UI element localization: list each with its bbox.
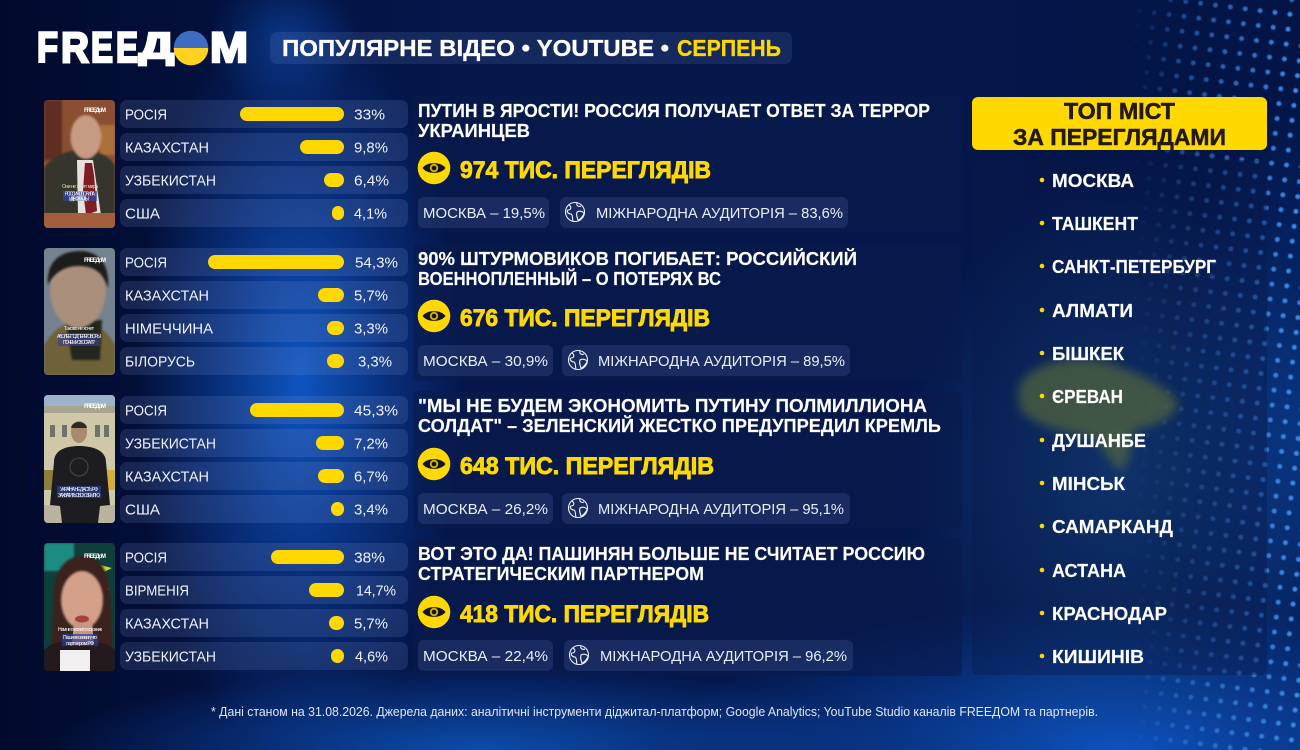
thumbnail: video 2: FREEДoM [84,258,106,264]
thumbnail: video 1: РОССИЯ СПОРИЛА [65,192,96,198]
thumbnail: video 4 [44,543,115,671]
info card: video 1: МОСКВА – 19,5% [423,205,545,222]
city list: АЛМАТИ [1052,300,1133,321]
country bars: video 4: УЗБЕКИСТАН [125,648,216,666]
thumbnail: video 1: FREEДoM [84,108,106,114]
info card: video 2: 90% ШТУРМОВИКОВ ПОГИБАЕТ: РОССИЙСКИЙ [418,248,857,269]
thumbnail: video 4: партнером РФ [66,641,94,647]
country bars: video 2: 3,3% [354,320,388,338]
info card: video 4: 418 ТИС. ПЕРЕГЛЯДІВ [460,601,709,628]
thumbnail: video 4: Нам не считается союзник [58,627,103,633]
header pill: СЕРПЕНЬ [677,35,781,61]
info card: video 1 [413,95,962,233]
logo: M [210,24,248,72]
country bars: video 4: 4,6% [355,648,388,666]
country bars: video 4: РОСІЯ [125,550,167,566]
country bars: video 4 [120,543,408,670]
info card: video 2: МОСКВА – 30,9% [423,353,548,370]
panel: video 1 [44,95,962,233]
info card: video 4: СТРАТЕГИЧЕСКИМ ПАРТНЕРОМ [418,563,704,584]
thumbnail: video 2 [44,248,115,375]
info card: video 4: МІЖНАРОДНА АУДИТОРІЯ – 96,2% [600,648,847,665]
city list: МІНСЬК [1052,473,1126,494]
thumbnail: video 1: Они не хотят мира [62,184,98,190]
city list: ТАШКЕНТ [1052,213,1139,234]
thumbnail: video 1: ИДЕЮ СВОБОДЫ [69,196,90,202]
info card: video 3: 648 ТИС. ПЕРЕГЛЯДІВ [460,453,714,480]
country bars: video 3: КАЗАХСТАН [125,468,209,486]
city list: КРАСНОДАР [1052,603,1167,624]
info card: video 1: МІЖНАРОДНА АУДИТОРІЯ – 83,6% [596,205,843,222]
country bars: video 1: КАЗАХСТАН [125,140,209,156]
country bars: video 4: 38% [354,550,385,566]
country bars: video 1: УЗБЕКИСТАН [125,172,216,190]
footnote: * Дані станом на 31.08.2026. Джерела даних: аналітичні інструменти діджитал-платформ; Google Analytics; YouTube Studio каналів FREEДOM та партнерів. [211,705,1098,719]
thumbnail: video 4: FREEДoM [84,554,106,560]
info card: video 4 [413,538,962,676]
heading: top cities [972,97,1267,150]
country bars: video 3: 3,4% [354,502,388,518]
info card: video 4: МОСКВА – 22,4% [423,648,548,665]
logo: E [116,24,138,72]
logo: E [91,24,113,72]
info card: video 1: УКРАИНЦЕВ [418,120,530,141]
info card: video 3: СОЛДАТ" – ЗЕЛЕНСКИЙ ЖЕСТКО ПРЕДУПРЕДИЛ КРЕМЛЬ [418,415,941,436]
country bars: video 2: 5,7% [354,288,388,304]
country bars: video 4: ВІРМЕНІЯ [125,582,189,600]
country bars: video 1: 6,4% [354,172,389,190]
country bars: video 4: 5,7% [354,616,388,632]
logo [38,30,246,66]
panel: video 3 [44,391,962,529]
country bars: video 1: США [125,206,160,222]
info card: video 3 [413,391,962,529]
city list: БІШКЕК [1052,343,1125,364]
info card: video 3: МОСКВА – 26,2% [423,501,548,518]
info card: video 4: ВОТ ЭТО ДА! ПАШИНЯН БОЛЬШЕ НЕ СЧИТАЕТ РОССИЮ [418,543,925,564]
thumbnail: video 2: Таково не хочет [64,326,95,332]
country bars: video 1: 4,1% [354,206,387,222]
country bars: video 2: 54,3% [355,254,398,272]
country bars: video 4: КАЗАХСТАН [125,616,209,632]
info card: video 2 [413,243,962,381]
heading: top cities: ЗА ПЕРЕГЛЯДАМИ [1013,124,1226,150]
country bars: video 2: НІМЕЧЧИНА [125,320,213,338]
panel: top cities [972,97,1267,675]
country bars: video 2: РОСІЯ [125,254,167,272]
logo: Д [139,25,174,66]
country bars: video 3: 6,7% [354,468,388,486]
city list: КИШИНІВ [1052,646,1144,667]
logo: R [61,24,89,72]
info card: video 2: 676 ТИС. ПЕРЕГЛЯДІВ [460,305,710,332]
info card: video 2: ВОЕННОПЛЕННЫЙ – О ПОТЕРЯХ ВС [418,268,721,289]
thumbnail: video 3: FREEДoM [84,404,106,410]
thumbnail: video 3: ЗАХВАТИТЬ СВОЮ ЗЕМЛЮ [58,493,100,499]
country bars: video 2: КАЗАХСТАН [125,288,209,304]
panel: video 2 [44,243,856,381]
city list: АСТАНА [1052,560,1126,581]
country bars: video 2 [120,248,408,375]
country bars: video 3: 7,2% [354,436,388,452]
country bars: video 3: РОСІЯ [125,402,167,420]
city list: ДУШАНБЕ [1052,430,1146,451]
thumbnail: video 2: ПОЧЕМУ ОБОСРАЛ? [63,340,95,346]
city list: САНКТ-ПЕТЕРБУРГ [1052,256,1216,277]
thumbnail: video 2: А БОЛЕЕ ПОД ПЕРЕГОВОРЫ [57,334,102,340]
info card: video 2: МІЖНАРОДНА АУДИТОРІЯ – 89,5% [598,353,845,370]
country bars: video 3: УЗБЕКИСТАН [125,436,216,452]
country bars: video 1 [120,100,408,227]
country bars: video 3 [120,396,408,523]
city list: МОСКВА [1052,170,1134,191]
country bars: video 2: 3,3% [358,354,392,370]
country bars: video 1: 33% [354,106,385,124]
city list: ЄРЕВАН [1052,386,1123,407]
city list: САМАРКАНД [1052,516,1173,537]
info card: video 3: МІЖНАРОДНА АУДИТОРІЯ – 95,1% [598,501,844,518]
header pill: ПОПУЛЯРНЕ ВІДЕО • YOUTUBE • [282,35,669,61]
city list [972,160,1267,675]
thumbnail: video 3 [44,395,115,523]
thumbnail: video 3: УКРАЇНА НЕ ДАСТЬ РФ [60,486,98,493]
heading: top cities: ТОП МІСТ [1064,98,1175,124]
logo: F [37,24,58,72]
country bars: video 1: 9,8% [354,140,388,156]
country bars: video 2: БІЛОРУСЬ [125,354,195,370]
country bars: video 1: РОСІЯ [125,106,167,124]
info card: video 3: "МЫ НЕ БУДЕМ ЭКОНОМИТЬ ПУТИНУ ПОЛМИЛЛИОНА [418,395,927,416]
info card: video 1: ПУТИН В ЯРОСТИ! РОССИЯ ПОЛУЧАЕТ ОТВЕТ ЗА ТЕРРОР [418,100,930,121]
country bars: video 3: 45,3% [354,402,398,420]
background dots and map [1018,0,1300,750]
panel: video 4 [44,538,962,676]
country bars: video 4: 14,7% [356,582,396,600]
header pill [270,32,792,64]
thumbnail: video 1 [44,100,115,228]
info card: video 1: 974 ТИС. ПЕРЕГЛЯДІВ [460,157,711,184]
thumbnail: video 4: Пашинян заявил, что [63,635,97,641]
country bars: video 3: США [125,502,160,518]
